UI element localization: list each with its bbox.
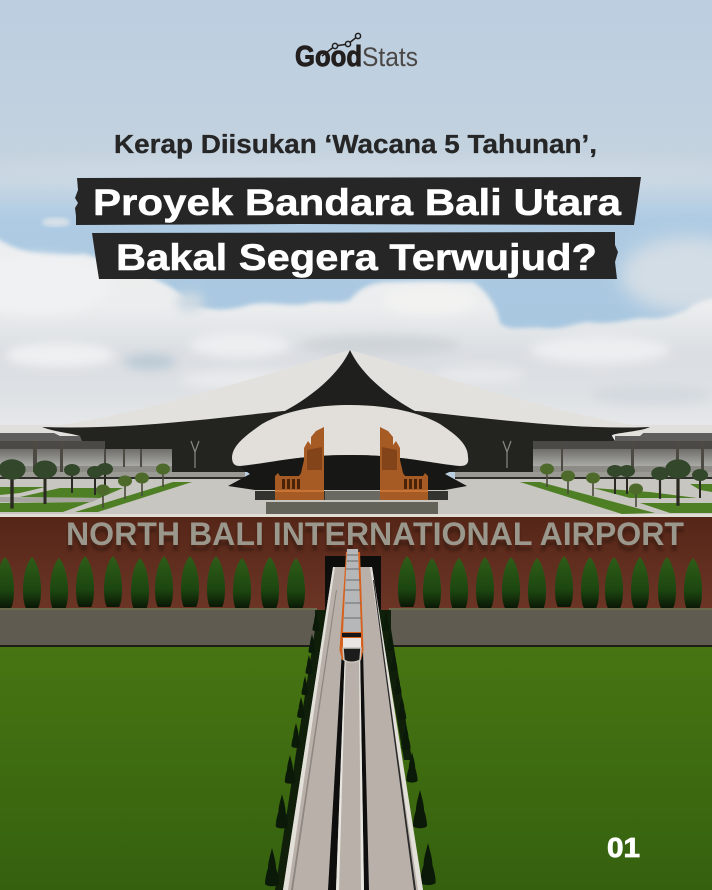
entrance shadow xyxy=(228,455,467,490)
clouds xyxy=(0,217,712,450)
tunnel opening xyxy=(325,556,381,610)
title banner: line 2: Bakal Segera Terwujud? xyxy=(116,236,597,278)
retaining walls xyxy=(0,608,712,647)
cypress row: right xyxy=(398,556,702,609)
logo: GoodStats: Stats xyxy=(362,42,418,72)
logo: GoodStats xyxy=(295,33,418,73)
train xyxy=(340,549,364,662)
pine trees: right xyxy=(382,612,436,885)
Y columns xyxy=(191,441,511,468)
cypress row: left xyxy=(0,556,305,609)
lawns and trees: right xyxy=(520,459,712,514)
rail viaduct xyxy=(283,567,423,890)
heading: subtitle: Kerap Diisukan ‘Wacana 5 Tahunan’, xyxy=(114,131,597,159)
logo: GoodStats: Good xyxy=(295,41,362,73)
brick wall xyxy=(0,514,712,610)
roof: white canopy xyxy=(42,350,650,436)
airport name lettering: NORTH BALI INTERNATIONAL AIRPORT xyxy=(66,516,684,552)
page number: 01 xyxy=(607,832,640,863)
side terminal wings xyxy=(0,425,712,477)
hedge strips along viaduct xyxy=(275,610,412,890)
sky background xyxy=(0,0,712,440)
lawns xyxy=(0,647,712,890)
roof: black peak xyxy=(283,350,417,420)
white canopy oval xyxy=(232,405,468,466)
pine trees: left xyxy=(265,612,320,886)
terminal building xyxy=(42,350,650,472)
lawns and trees: left xyxy=(0,459,192,512)
title banner: line 1: Proyek Bandara Bali Utara xyxy=(93,181,622,223)
airport name lettering: NORTH BALI INTERNATIONAL AIRPORT xyxy=(66,522,684,558)
building: dark facade xyxy=(42,411,650,472)
split gate: right xyxy=(380,427,428,500)
forecourt plaza xyxy=(0,455,712,516)
split gate: left xyxy=(275,427,324,500)
